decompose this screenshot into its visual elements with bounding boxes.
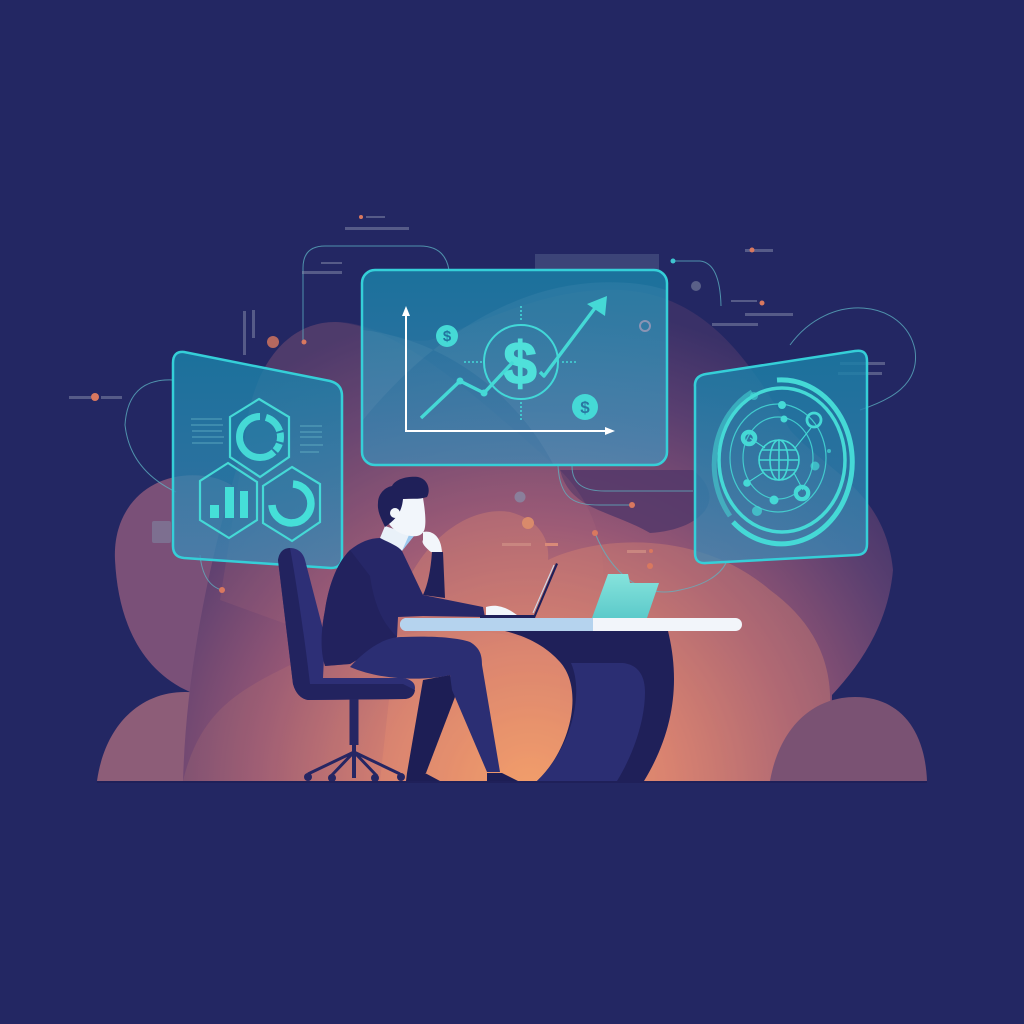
folder — [592, 574, 659, 618]
torso shadow — [322, 550, 397, 666]
desk top — [400, 618, 742, 631]
laptop — [480, 563, 558, 618]
hand at chin — [423, 532, 442, 552]
dollar circle — [464, 306, 578, 420]
chair back and seat — [278, 548, 415, 700]
hexagon: bar chart — [200, 463, 257, 538]
illustration: analyst at desk with holographic finance panels — [69, 215, 927, 783]
dollar circle: $ — [503, 330, 537, 397]
hexagon: progress ring — [263, 467, 320, 541]
circuit lines and dots — [125, 246, 916, 592]
network nodes — [743, 392, 831, 516]
forearm raised to chin — [423, 552, 445, 598]
chart axes — [402, 306, 615, 435]
face — [388, 498, 425, 536]
coin icons: $ — [580, 398, 590, 417]
back leg — [407, 675, 455, 773]
chair back shadow — [278, 548, 415, 700]
floor — [97, 781, 927, 783]
coin icons — [436, 325, 598, 420]
hair — [378, 477, 429, 527]
chair stand — [304, 699, 405, 782]
growth arrow line — [421, 296, 607, 418]
thigh and lower leg — [350, 637, 500, 772]
collar and neck — [380, 526, 412, 551]
panel: hexagon metrics — [173, 352, 342, 568]
hexagon: donut chart — [230, 399, 289, 477]
front foot — [487, 773, 518, 781]
panel: global network — [695, 351, 867, 563]
coin icons: $ — [443, 328, 452, 345]
person — [322, 477, 518, 781]
background blobs — [97, 290, 927, 781]
back foot — [406, 773, 440, 781]
orbit rings — [714, 380, 852, 544]
ear — [390, 508, 400, 518]
hand on laptop — [486, 606, 517, 615]
panel: financial growth chart — [362, 270, 667, 465]
desk base — [505, 631, 674, 781]
torso and arm — [322, 538, 485, 666]
chair — [278, 548, 415, 782]
globe — [747, 428, 811, 490]
